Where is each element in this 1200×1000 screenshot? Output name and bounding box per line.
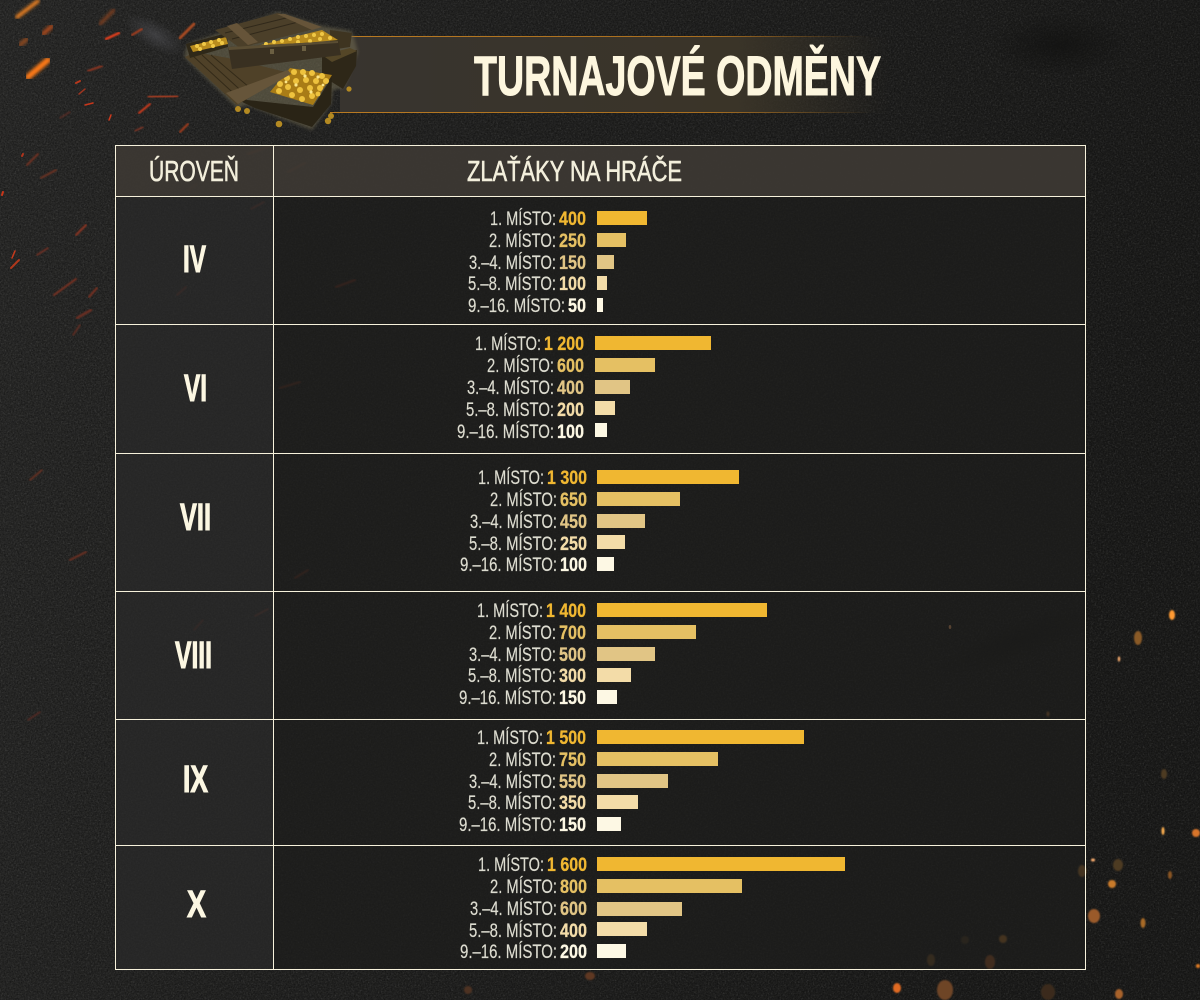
level column fill (116, 197, 273, 969)
reward IX 5th-8th place: 350 (559, 793, 586, 814)
reward IV 2nd place: 2. MÍSTO: (489, 231, 556, 252)
reward IV 3rd-4th place: 3.–4. MÍSTO: (469, 253, 556, 274)
reward X 9th-16th place: 200 (560, 942, 587, 963)
reward VII 9th-16th place: 9.–16. MÍSTO: (460, 555, 557, 576)
reward VII 3rd-4th place (470, 512, 645, 533)
reward X 2nd place: 2. MÍSTO: (490, 877, 557, 898)
reward IV 1st place: 1. MÍSTO: (490, 209, 556, 230)
reward IV 3rd-4th place: 150 (559, 253, 586, 274)
reward VI 9th-16th place: 9.–16. MÍSTO: (457, 422, 554, 443)
reward IX 3rd-4th place: 3.–4. MÍSTO: (469, 772, 556, 793)
reward IV 2nd place (489, 231, 626, 252)
icon: wooden crates full of gold coins (184, 12, 358, 130)
reward VIII 5th-8th place: 300 (559, 666, 586, 687)
lower crate body (212, 77, 332, 127)
reward IV 1st place (490, 209, 647, 230)
reward VIII 3rd-4th place: 3.–4. MÍSTO: (469, 645, 556, 666)
reward IV 5th-8th place: 100 (559, 274, 586, 295)
reward VI 5th-8th place: 200 (557, 400, 584, 421)
reward X 5th-8th place: 400 (560, 921, 587, 942)
reward X 2nd place (490, 877, 742, 898)
reward VIII 1st place (477, 601, 767, 622)
reward IV 5th-8th place: 5.–8. MÍSTO: (468, 274, 556, 295)
tier label VII: VII (180, 497, 211, 539)
reward VII 5th-8th place: 250 (560, 534, 587, 555)
reward IX 2nd place: 750 (559, 750, 586, 771)
tier label IV: IV (183, 239, 206, 281)
reward VII 2nd place: 2. MÍSTO: (490, 490, 557, 511)
reward IV 9th-16th place: 9.–16. MÍSTO: (468, 296, 565, 317)
reward VII 1st place: 1 300 (547, 468, 587, 489)
row: tier X (187, 855, 845, 963)
reward VIII 3rd-4th place: 500 (559, 645, 586, 666)
reward VIII 3rd-4th place (469, 645, 655, 666)
reward X 1st place: 1 600 (547, 855, 587, 876)
crate glow (184, 12, 358, 130)
reward X 1st place (478, 855, 845, 876)
tier label IX: IX (183, 759, 208, 801)
reward IX 5th-8th place: 5.–8. MÍSTO: (468, 793, 556, 814)
header: level: ÚROVEŇ (149, 155, 239, 188)
reward VI 1st place: 1. MÍSTO: (475, 334, 541, 355)
row: tier IV (183, 209, 647, 317)
reward IX 3rd-4th place: 550 (559, 772, 586, 793)
tier label X: X (187, 884, 206, 926)
lower lid planks (185, 52, 290, 105)
reward VIII 2nd place: 700 (559, 623, 586, 644)
table (115, 145, 1086, 970)
reward VI 2nd place: 2. MÍSTO: (487, 356, 554, 377)
reward VIII 2nd place: 2. MÍSTO: (489, 623, 556, 644)
background: orange ember streaks, upper left (2, 1, 355, 720)
reward VIII 9th-16th place: 9.–16. MÍSTO: (459, 688, 556, 709)
reward X 1st place: 1. MÍSTO: (478, 855, 544, 876)
tier label VI: VI (184, 368, 207, 410)
reward IX 5th-8th place (468, 793, 638, 814)
title banner (330, 36, 890, 113)
row: tier VI (184, 334, 711, 443)
tier label VIII: VIII (175, 635, 212, 677)
reward VI 3rd-4th place: 3.–4. MÍSTO: (467, 378, 554, 399)
reward X 9th-16th place: 9.–16. MÍSTO: (460, 942, 557, 963)
reward VI 1st place (475, 334, 711, 355)
reward VI 1st place: 1 200 (544, 334, 584, 355)
reward X 5th-8th place: 5.–8. MÍSTO: (469, 921, 557, 942)
title: TURNAJOVÉ ODMĚNY (474, 44, 881, 107)
row: tier IX (183, 728, 804, 836)
reward VIII 9th-16th place: 150 (559, 688, 586, 709)
loose coins (235, 86, 352, 127)
reward VI 5th-8th place: 5.–8. MÍSTO: (466, 400, 554, 421)
reward X 2nd place: 800 (560, 877, 587, 898)
reward X 5th-8th place (469, 921, 647, 942)
top crate gold (257, 30, 338, 47)
reward VI 2nd place: 600 (557, 356, 584, 377)
table header row fill (116, 146, 1085, 196)
reward IX 2nd place (489, 750, 718, 771)
reward VI 3rd-4th place (467, 378, 630, 399)
reward IV 1st place: 400 (559, 209, 586, 230)
reward X 3rd-4th place: 600 (560, 899, 587, 920)
reward VII 1st place (478, 468, 739, 489)
reward VIII 2nd place (489, 623, 696, 644)
reward IX 2nd place: 2. MÍSTO: (489, 750, 556, 771)
reward IX 3rd-4th place (469, 772, 668, 793)
reward VII 5th-8th place: 5.–8. MÍSTO: (469, 534, 557, 555)
reward column fill (274, 197, 1085, 969)
right crate (322, 30, 357, 89)
reward VI 9th-16th place: 100 (557, 422, 584, 443)
lower crate gold (270, 68, 332, 105)
reward X 3rd-4th place (470, 899, 682, 920)
reward VII 3rd-4th place: 450 (560, 512, 587, 533)
top crate lid (215, 13, 322, 48)
reward VII 9th-16th place: 100 (560, 555, 587, 576)
reward X 3rd-4th place: 3.–4. MÍSTO: (470, 899, 557, 920)
table grid lines (115, 145, 1086, 970)
reward VIII 1st place: 1 400 (546, 601, 586, 622)
reward VII 3rd-4th place: 3.–4. MÍSTO: (470, 512, 557, 533)
reward VI 2nd place (487, 356, 655, 377)
reward VI 3rd-4th place: 400 (557, 378, 584, 399)
reward IX 9th-16th place: 9.–16. MÍSTO: (459, 815, 556, 836)
background: glowing sparks, lower right (464, 610, 1200, 1000)
reward IX 1st place: 1 500 (546, 728, 586, 749)
top crate front (228, 41, 341, 69)
reward VIII 5th-8th place (468, 666, 631, 687)
reward IX 1st place: 1. MÍSTO: (477, 728, 543, 749)
reward VIII 5th-8th place: 5.–8. MÍSTO: (468, 666, 556, 687)
reward IV 9th-16th place: 50 (568, 296, 586, 317)
row: tier VIII (175, 601, 767, 709)
reward IX 1st place (477, 728, 804, 749)
header: gold per player: ZLAŤÁKY NA HRÁČE (467, 154, 682, 188)
reward VIII 1st place: 1. MÍSTO: (477, 601, 543, 622)
reward IX 9th-16th place: 150 (559, 815, 586, 836)
reward VII 2nd place: 650 (560, 490, 587, 511)
left crate and gold (186, 33, 228, 58)
reward IV 2nd place: 250 (559, 231, 586, 252)
reward VII 1st place: 1. MÍSTO: (478, 468, 544, 489)
row: tier VII (180, 468, 739, 576)
reward VII 2nd place (490, 490, 680, 511)
